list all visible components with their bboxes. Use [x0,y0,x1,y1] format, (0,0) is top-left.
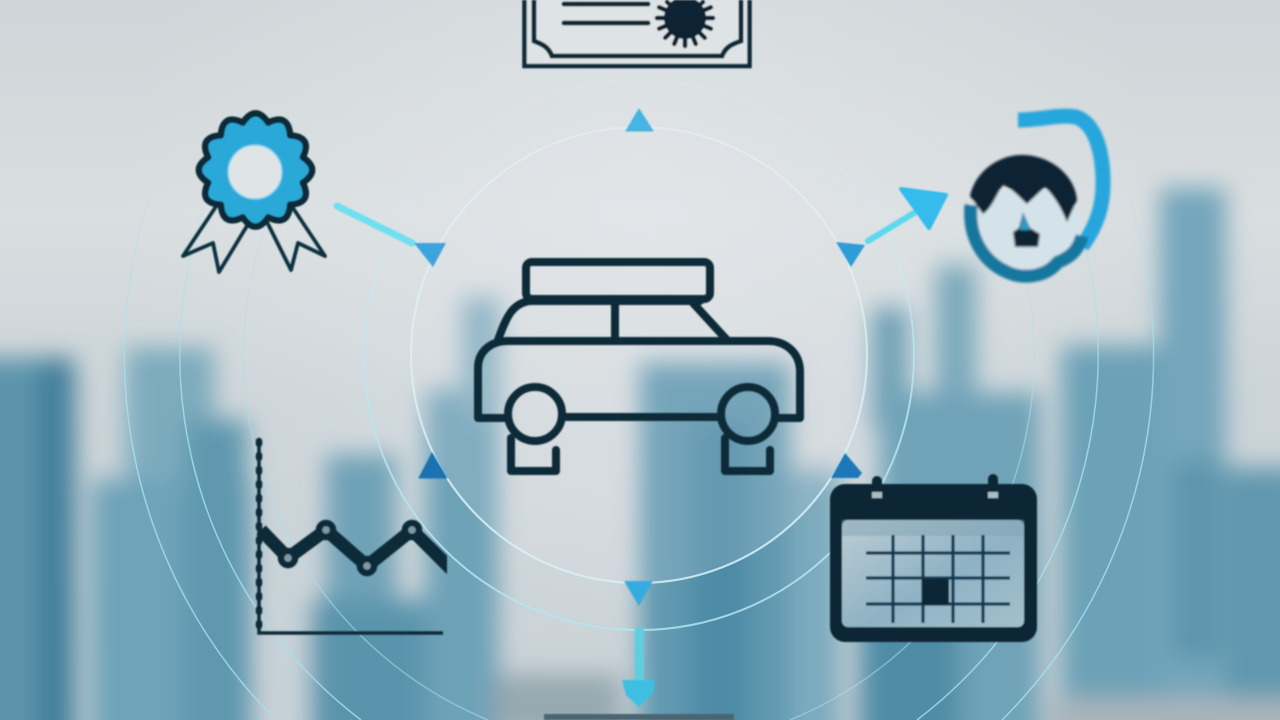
concentric rings [124,80,1154,720]
arrow: rosette to ring [337,206,446,267]
icon: certificate [524,0,750,66]
icon: line chart [259,441,452,633]
arrow: lower left marker [419,453,447,478]
seal [657,0,713,46]
arrow: bottom marker and down arrow [622,581,655,707]
arrow: ring to globe [836,189,946,267]
icon: award rosette [183,113,325,272]
inner disc haze [411,127,867,583]
arrow: top marker [626,109,653,131]
icon: distorted globe [970,116,1103,276]
icon: calendar [830,474,1037,642]
bottom edge: next icon cropped [544,714,734,720]
arrow: lower right marker [831,453,862,478]
icon: car with roof box [478,262,800,471]
